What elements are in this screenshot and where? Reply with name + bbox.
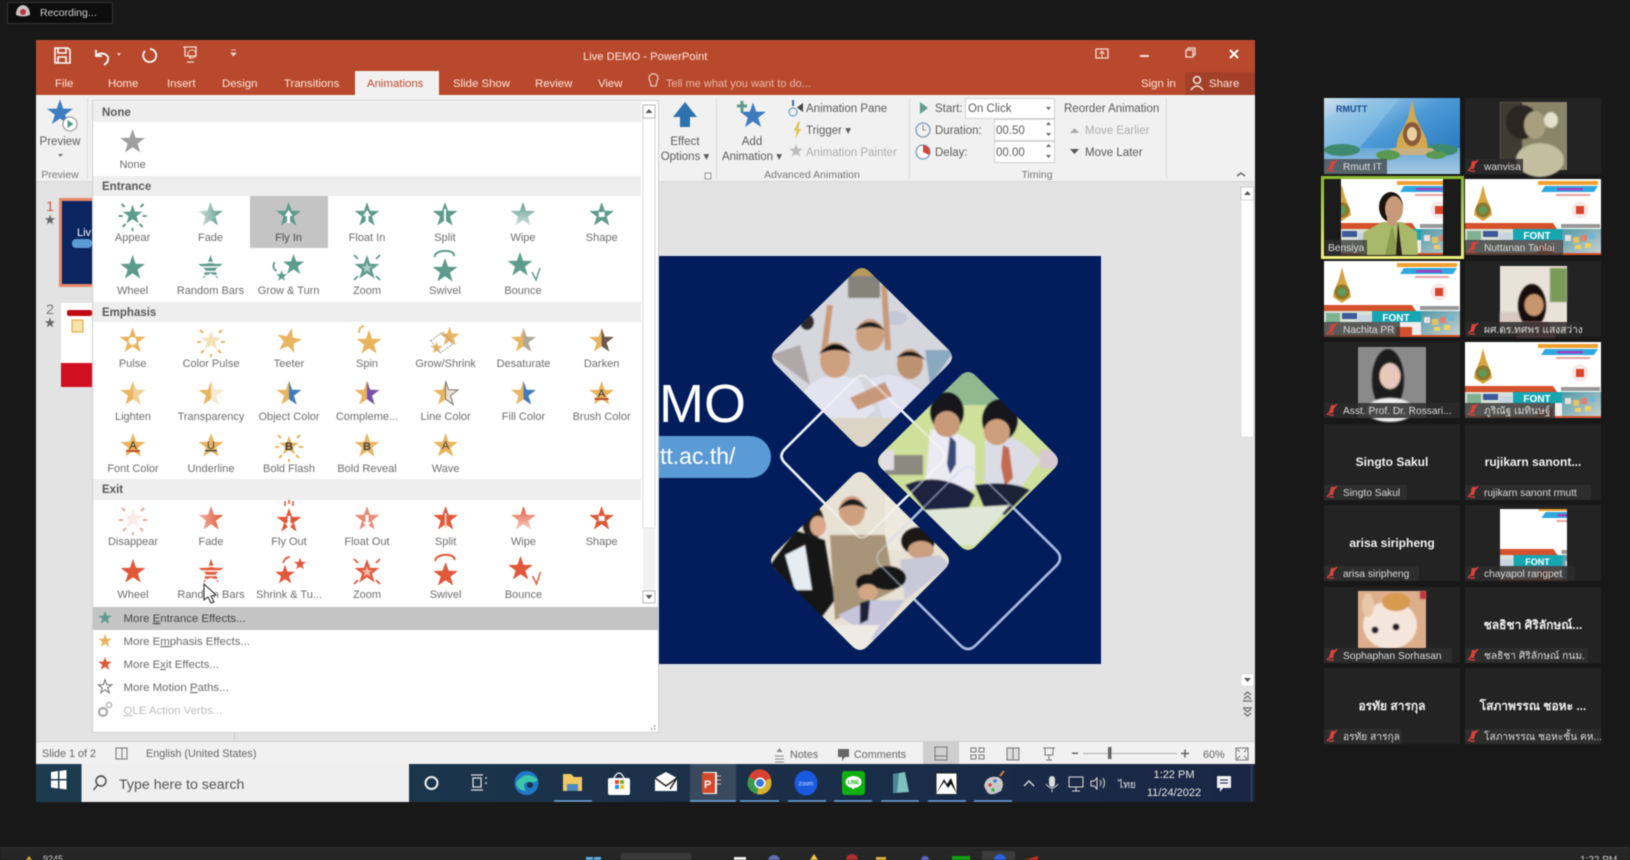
menu: emphasis effects: More Emphasis Effects... bbox=[124, 636, 250, 648]
slide canvas bbox=[658, 256, 1101, 664]
outline diamond upper bbox=[782, 376, 944, 538]
timing: Start: bbox=[935, 103, 962, 115]
effect: Split bbox=[433, 202, 457, 244]
section: Exit bbox=[93, 479, 641, 500]
effect: Complementary: Compleme... bbox=[336, 411, 398, 423]
gallery scrollbar bbox=[643, 105, 655, 603]
fly in highlight bbox=[250, 196, 328, 248]
advanced animation: Advanced Animation bbox=[764, 169, 860, 181]
tile: Thai participant with slide: ภูริณัฐ เมทินษฐ์ bbox=[1484, 405, 1551, 417]
menu: entrance effects: More Entrance Effects... bbox=[124, 613, 246, 625]
effect: Bold Reveal bbox=[337, 433, 397, 475]
reorder animation: Move Later bbox=[1085, 147, 1143, 159]
effect: Split: Split bbox=[434, 232, 456, 244]
effect: Underline: U bbox=[207, 440, 215, 452]
status bar bbox=[36, 742, 1255, 764]
effect options: Options ▾ bbox=[661, 151, 710, 163]
tile: Rmutt IT: RMUTT bbox=[1336, 104, 1368, 114]
active app underlines bbox=[554, 800, 1012, 802]
menu: ole action verbs bbox=[99, 702, 222, 717]
effect: Underline: Underline bbox=[187, 463, 235, 475]
effect: Bold Flash: B bbox=[285, 441, 293, 453]
effect: Shape: Shape bbox=[586, 232, 618, 244]
section: Emphasis bbox=[93, 302, 641, 322]
photo diamond: classroom bbox=[771, 267, 953, 448]
effect options bbox=[661, 102, 711, 179]
title bar: Live DEMO - PowerPoint bbox=[583, 51, 708, 63]
tile: chayapol rangpet: chayapol rangpet bbox=[1484, 569, 1562, 580]
tile: Bensiya active speaker: FONT bbox=[1384, 231, 1409, 241]
tile: Sophaphan Sorhasan bbox=[1324, 587, 1460, 663]
effect: Random Bars exit bbox=[177, 559, 245, 601]
preview group: Preview bbox=[40, 136, 81, 148]
effect: Underline bbox=[187, 433, 235, 475]
section: None bbox=[93, 102, 641, 122]
effect: Grow/Shrink bbox=[415, 327, 476, 370]
effect: Bold Flash bbox=[263, 435, 315, 475]
tile: Bensiya active speaker bbox=[1322, 178, 1462, 258]
advanced animation: Trigger ▾ bbox=[806, 125, 851, 137]
status bar: 60% bbox=[1203, 749, 1225, 761]
tile: chayapol rangpet bbox=[1465, 505, 1602, 581]
effect: Shrink and Turn: Shrink & Tu... bbox=[256, 589, 322, 601]
effect: Wipe exit bbox=[511, 506, 536, 548]
tile: arisa siripheng bbox=[1324, 505, 1460, 581]
ribbon tabs: Sign in bbox=[1141, 78, 1176, 90]
outline overlays across photos bbox=[782, 376, 1060, 649]
effect: Shape bbox=[586, 202, 618, 244]
effect: Swivel exit bbox=[430, 555, 461, 601]
effect: Bounce: Bounce bbox=[504, 285, 542, 297]
advanced animation: Animation Painter bbox=[806, 147, 897, 159]
effect: Float Out: Float Out bbox=[344, 536, 390, 548]
preview group bbox=[40, 99, 81, 181]
tile: wanvisa: wanvisa bbox=[1483, 162, 1521, 173]
slide thumbnails: Liv bbox=[77, 227, 92, 239]
effect: Bounce exit: Bounce bbox=[505, 589, 542, 601]
section: Exit: Exit bbox=[102, 484, 123, 496]
effect: Pulse bbox=[119, 327, 146, 370]
preview group: Preview bbox=[41, 169, 79, 181]
title bar bbox=[36, 40, 1255, 95]
system tray: 11/24/2022 bbox=[1147, 787, 1201, 799]
taskbar icons: zoom bbox=[799, 782, 813, 788]
status bar: Comments bbox=[854, 749, 907, 761]
tile: rujikarn sanont bbox=[1465, 424, 1601, 500]
mouse cursor bbox=[204, 584, 216, 603]
advanced animation: Animation Pane bbox=[806, 103, 887, 115]
section: Entrance bbox=[93, 176, 641, 196]
tile: Nuttanan Tanlai: FONT bbox=[1523, 231, 1551, 242]
status bar: Slide 1 of 2 bbox=[42, 748, 96, 760]
effect: Color Pulse bbox=[183, 330, 239, 370]
timing bbox=[916, 98, 1054, 181]
effect: Random Bars bbox=[177, 255, 245, 297]
effect: Wave: Wave bbox=[432, 463, 459, 475]
effect: Swivel: Swivel bbox=[429, 285, 461, 297]
tile: Rmutt IT bbox=[1324, 98, 1460, 174]
effect: Lighten: Lighten bbox=[115, 411, 151, 423]
tile: Orathai: อรทัย สารกุล bbox=[1343, 732, 1400, 743]
effect: Line Color bbox=[421, 381, 471, 423]
effect: Object Color: Object Color bbox=[258, 411, 320, 423]
tile: Nuttanan Tanlai bbox=[1465, 179, 1601, 255]
tile: Thai participant with slide bbox=[1465, 342, 1601, 418]
effect: Zoom exit: Zoom bbox=[353, 589, 381, 601]
effect: Grow and Turn: Grow & Turn bbox=[258, 285, 319, 297]
menu: exit effects: More Exit Effects... bbox=[124, 659, 219, 671]
effect: Spin bbox=[356, 326, 381, 370]
ribbon tabs: Home bbox=[108, 78, 138, 90]
tile: Asst. Prof. Dr. Rossari: Asst. Prof. Dr. Rossari... bbox=[1343, 406, 1452, 417]
effect options: Effect bbox=[670, 136, 700, 148]
effect: Darken: Darken bbox=[584, 358, 619, 370]
ribbon tabs: File bbox=[55, 78, 73, 90]
timing: Delay: bbox=[935, 147, 968, 159]
ribbon tabs: Share bbox=[1209, 78, 1239, 90]
advanced animation bbox=[722, 100, 897, 181]
ribbon tabs bbox=[55, 71, 1255, 95]
tile: Bensiya active speaker: Bensiya bbox=[1328, 243, 1365, 254]
timing: Timing bbox=[1021, 169, 1053, 181]
tile: Chonthicha: ชลธิชา ศิริลักษณ์ กนม. bbox=[1484, 650, 1585, 662]
recording indicator: Recording... bbox=[40, 7, 97, 19]
effect: Fade exit: Fade bbox=[198, 536, 224, 548]
tile: Singto Sakul bbox=[1324, 424, 1460, 500]
effect: Wipe bbox=[510, 202, 536, 244]
slide thumbnails: 1 bbox=[46, 198, 54, 214]
taskbar icons bbox=[426, 764, 1004, 802]
effect: Zoom bbox=[353, 255, 381, 297]
ribbon tabs: Transitions bbox=[284, 78, 340, 90]
timing: Duration: bbox=[935, 125, 982, 137]
tile: Orathai bbox=[1324, 668, 1460, 744]
effect: Font Color bbox=[107, 433, 159, 475]
tile: Thai lecturer bbox=[1465, 261, 1601, 337]
windows logo bbox=[51, 770, 66, 790]
effect: Float In bbox=[349, 202, 385, 244]
section: Emphasis: Emphasis bbox=[102, 307, 156, 319]
effect: Wheel exit bbox=[117, 559, 149, 601]
effect: Font Color: A bbox=[129, 440, 137, 452]
effect: Brush Color: Brush Color bbox=[573, 411, 631, 423]
section: Entrance: Entrance bbox=[102, 181, 151, 193]
effect: Fly In: Fly In bbox=[275, 232, 302, 244]
tile: Singto Sakul: Singto Sakul bbox=[1356, 455, 1428, 469]
effect: Color Pulse: Color Pulse bbox=[183, 358, 239, 370]
ribbon tabs: Slide Show bbox=[453, 78, 511, 90]
effect: Wipe: Wipe bbox=[510, 232, 536, 244]
status bar: English (United States) bbox=[146, 748, 256, 760]
effect: Teeter bbox=[274, 326, 305, 370]
effect: Fly Out bbox=[271, 500, 307, 548]
tile: Nuttanan Tanlai: Nuttanan Tanlai bbox=[1484, 243, 1555, 254]
effect: Wheel bbox=[117, 255, 148, 297]
tile: rujikarn sanont: rujikarn sanont... bbox=[1485, 455, 1581, 469]
tile: Sophaphan Sorhasan: Sophaphan Sorhasan bbox=[1343, 651, 1442, 662]
effect: Transparency: Transparency bbox=[178, 411, 245, 423]
menu: motion paths: More Motion Paths... bbox=[124, 682, 229, 694]
effect: Wave bbox=[432, 433, 459, 475]
powerpoint window bbox=[36, 40, 1255, 802]
ribbon tabs: Insert bbox=[167, 78, 196, 90]
tile: Chonthicha: ชลธิชา ศิริลักษณ์... bbox=[1484, 618, 1582, 632]
menu: exit effects bbox=[98, 657, 219, 671]
tile: Nachita PR bbox=[1324, 261, 1460, 337]
effect: Shape exit: Shape bbox=[586, 536, 618, 548]
url pill bbox=[658, 436, 771, 478]
effect: Spin: Spin bbox=[356, 358, 378, 370]
section: None: None bbox=[102, 107, 131, 119]
effect: Appear bbox=[115, 204, 151, 244]
tile: Thai lecturer: ผศ.ดร.ทศพร แสงสว่าง bbox=[1484, 325, 1583, 336]
tile: arisa siripheng: arisa siripheng bbox=[1343, 569, 1410, 580]
tile: rujikarn sanont: rujikarn sanont rmutt bbox=[1484, 488, 1577, 499]
effect: Grow and Turn bbox=[258, 254, 319, 297]
effect: Bounce bbox=[504, 252, 542, 297]
effect: Appear: Appear bbox=[115, 232, 151, 244]
reorder animation: Reorder Animation bbox=[1064, 103, 1159, 115]
system tray: ไทย bbox=[1117, 779, 1136, 791]
effect: Split exit: Split bbox=[435, 536, 456, 548]
effect: None bbox=[119, 129, 146, 171]
effect: Disappear: Disappear bbox=[108, 536, 158, 548]
effect: Brush Color: A bbox=[598, 388, 606, 400]
footer menu bbox=[93, 607, 658, 729]
advanced animation: Animation ▾ bbox=[722, 151, 782, 163]
slide title fragment: MO bbox=[659, 374, 746, 434]
effect: Bold Reveal: Bold Reveal bbox=[337, 463, 397, 475]
tile: arisa siripheng: arisa siripheng bbox=[1349, 536, 1435, 550]
windows taskbar bbox=[36, 764, 1255, 802]
menu: ole action verbs: OLE Action Verbs... bbox=[124, 705, 222, 717]
effect: Fill Color bbox=[502, 381, 546, 423]
effect: Zoom exit bbox=[353, 559, 381, 601]
effect: Bold Flash: Bold Flash bbox=[263, 463, 315, 475]
animation gallery dropdown bbox=[92, 100, 658, 732]
effect: Fly Out: Fly Out bbox=[271, 536, 307, 548]
effect: Desaturate: Desaturate bbox=[497, 358, 550, 370]
effect: Float Out bbox=[344, 506, 390, 548]
effect: Pulse: Pulse bbox=[119, 358, 146, 370]
effect: Swivel bbox=[429, 251, 461, 297]
ribbon background bbox=[36, 95, 1255, 182]
effect: Line Color: Line Color bbox=[421, 411, 471, 423]
effect: Zoom: Zoom bbox=[353, 285, 381, 297]
recording indicator bbox=[8, 2, 112, 24]
effect: Transparency bbox=[178, 381, 245, 423]
participant gallery bbox=[1322, 98, 1602, 744]
effect: Float In: Float In bbox=[349, 232, 385, 244]
effect: Wheel: Wheel bbox=[117, 285, 148, 297]
reorder animation: Move Earlier bbox=[1085, 125, 1150, 137]
effect: Lighten bbox=[115, 381, 151, 423]
slide thumbnails: 2 bbox=[46, 301, 54, 317]
tile: wanvisa bbox=[1465, 98, 1601, 177]
ribbon tabs: View bbox=[598, 78, 623, 90]
system tray bbox=[1024, 769, 1231, 799]
tile: Chonthicha bbox=[1465, 587, 1601, 663]
tile: chayapol rangpet: FONT bbox=[1525, 557, 1550, 567]
effect: Brush Color bbox=[573, 381, 631, 423]
tile: Rmutt IT: Rmutt IT bbox=[1343, 162, 1382, 173]
effect: Split exit bbox=[433, 506, 458, 548]
taskbar icons: P bbox=[704, 779, 711, 791]
status bar: Notes bbox=[790, 749, 819, 761]
effect: Wheel exit: Wheel bbox=[117, 589, 149, 601]
advanced animation: Add bbox=[742, 136, 762, 148]
ribbon tabs: Review bbox=[535, 78, 573, 90]
effect: Fly In bbox=[275, 202, 302, 244]
tile: Nachita PR: Nachita PR bbox=[1343, 325, 1395, 336]
effect: Complementary bbox=[336, 381, 398, 423]
ribbon tabs: Design bbox=[222, 78, 257, 90]
effect: Wave: A bbox=[442, 440, 450, 452]
effect: Random Bars: Random Bars bbox=[177, 285, 245, 297]
effect: Darken bbox=[584, 328, 619, 370]
tile: Sopaphan bbox=[1465, 668, 1602, 744]
effect: Fade bbox=[198, 202, 223, 244]
slide thumbnails bbox=[45, 198, 92, 387]
tile: Asst. Prof. Dr. Rossari bbox=[1324, 342, 1460, 422]
effect: Shape exit bbox=[586, 506, 618, 548]
effect: Bold Reveal: B bbox=[363, 441, 371, 453]
effect: Teeter: Teeter bbox=[274, 358, 305, 370]
slide scrollbar bbox=[1241, 187, 1254, 716]
effect: Wipe exit: Wipe bbox=[511, 536, 536, 548]
effect: Bounce exit bbox=[505, 556, 542, 601]
bottom desktop taskbar strip bbox=[0, 847, 1630, 860]
photo diamond: students reading bbox=[877, 371, 1059, 551]
tile: Thai participant with slide: FONT bbox=[1523, 394, 1551, 405]
menu: motion paths bbox=[98, 680, 229, 694]
tile: Sopaphan: โสภาพรรณ ชอหะชั้น คห... bbox=[1484, 728, 1602, 743]
outline diamond lower bbox=[877, 467, 1060, 649]
effect: Desaturate bbox=[497, 328, 550, 370]
effect: Swivel exit: Swivel bbox=[430, 589, 461, 601]
effect: Fade exit bbox=[198, 506, 224, 548]
tile: Singto Sakul: Singto Sakul bbox=[1343, 488, 1400, 499]
effect: Fill Color: Fill Color bbox=[502, 411, 546, 423]
system tray: 1:22 PM bbox=[1154, 769, 1194, 781]
effect: Random Bars exit: Random Bars bbox=[177, 589, 245, 601]
ribbon tabs: Tell me what you want to do... bbox=[666, 78, 811, 90]
ribbon tabs: Animations bbox=[367, 78, 424, 90]
reorder animation bbox=[1064, 103, 1159, 159]
timing: 00.00 bbox=[996, 147, 1025, 159]
effect: Disappear bbox=[108, 508, 158, 548]
timing: On Click bbox=[968, 103, 1012, 115]
tile: Nachita PR: FONT bbox=[1382, 313, 1410, 324]
effect: None: None bbox=[119, 159, 146, 171]
effect: Shrink and Turn bbox=[256, 557, 322, 601]
taskbar icons: LINE bbox=[848, 780, 860, 786]
effect: Grow/Shrink: Grow/Shrink bbox=[415, 358, 476, 370]
search box: Type here to search bbox=[119, 777, 244, 793]
effect: Fade: Fade bbox=[198, 232, 223, 244]
tile: Orathai: อรทัย สารกุล bbox=[1358, 699, 1426, 714]
effect: Object Color bbox=[258, 381, 320, 423]
tile: Sopaphan: โสภาพรรณ ชอหะ ... bbox=[1479, 698, 1586, 713]
timing: 00.50 bbox=[996, 125, 1025, 137]
url pill: tt.ac.th/ bbox=[660, 443, 736, 469]
photo diamond: teacher and students bbox=[770, 471, 950, 651]
search box bbox=[82, 764, 409, 802]
effect: Font Color: Font Color bbox=[107, 463, 159, 475]
